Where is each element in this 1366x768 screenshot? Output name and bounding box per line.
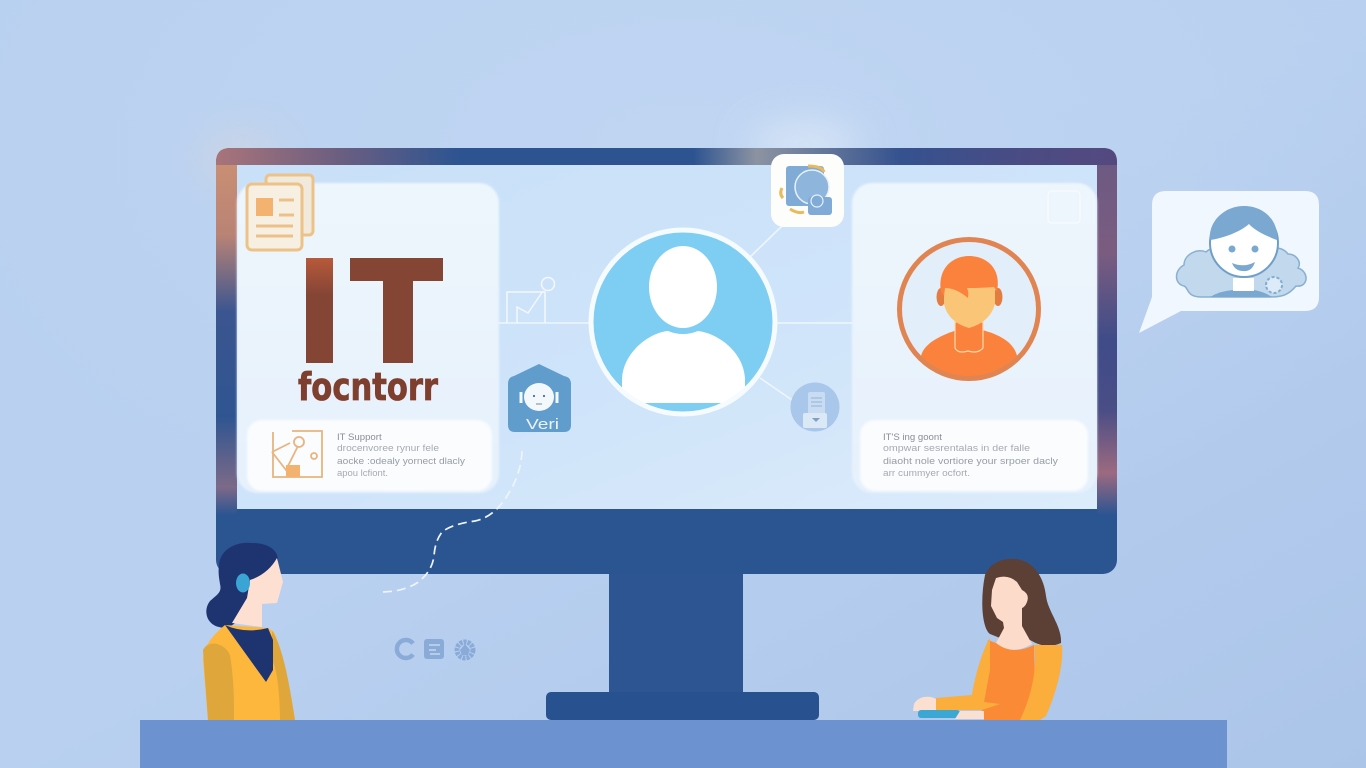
icon: phone badge [790,382,840,432]
avatar: orange person [900,240,1038,395]
desk [140,720,1227,768]
icon: clouds [1176,248,1306,297]
connector lines [498,226,853,400]
info card [247,420,492,491]
card text: ompwar sesrentalas in der falle [883,443,1030,454]
card text: apou lcfiont. [337,468,388,479]
heading: IT [306,258,443,363]
screen [237,165,1097,509]
card text: IT Support [337,432,382,443]
card text: drocenvoree rynur fele [337,443,439,454]
icon: chart outline [507,278,554,323]
icon: robot badge: Veri [526,416,559,433]
empty square icon [1048,191,1080,223]
panel: right card [852,183,1097,493]
person: left woman [203,543,295,720]
person: right woman [913,559,1062,720]
panel: left card [237,175,499,493]
icon: documents [247,175,313,250]
icon: smiling face [1210,206,1278,297]
dashed connector [381,451,522,592]
card text: aocke :odealy yornect dlacly [337,456,465,467]
icon: top tile [771,154,844,227]
monitor stand [546,570,819,720]
card text: IT'S ing goont [883,432,942,443]
icon: support diagram [272,431,322,477]
card text: arr cummyer ocfort. [883,468,970,479]
card text: diaoht nole vortiore your srpoer dacly [883,456,1058,467]
icon: robot badge [508,364,571,433]
small icons row [397,639,473,659]
subheading: focntorr [298,365,438,409]
avatar: central person [591,230,775,414]
monitor [216,148,1117,574]
card text [337,432,465,479]
info card [860,420,1088,491]
speech bubble [1139,191,1319,333]
card text [883,432,1058,479]
